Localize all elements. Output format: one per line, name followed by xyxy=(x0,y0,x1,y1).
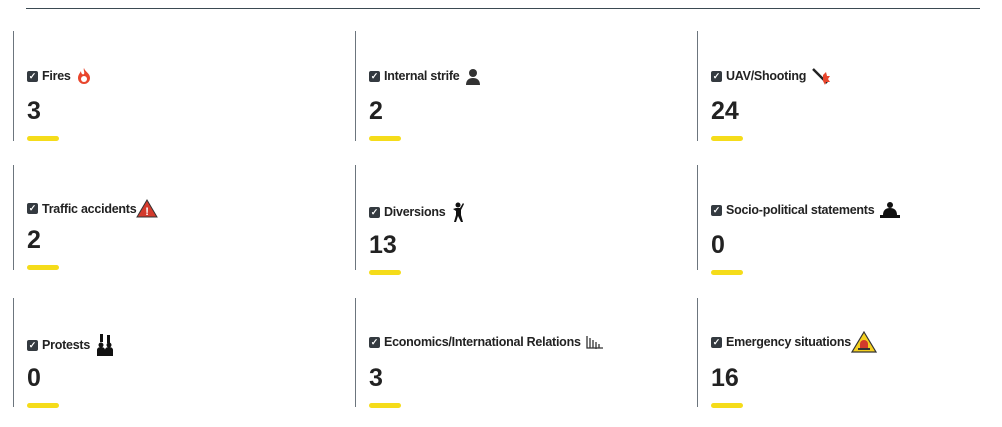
number: 24 xyxy=(711,97,739,125)
bar xyxy=(369,270,401,275)
panel: traffic accidents xyxy=(13,165,344,270)
label: ✓ xyxy=(29,203,36,213)
number: 13 xyxy=(369,231,397,259)
panel: economics xyxy=(355,298,686,407)
label xyxy=(711,68,830,85)
panel: internal strife xyxy=(355,31,686,141)
label: fires: ✓ xyxy=(29,70,36,80)
bar xyxy=(369,403,401,408)
label xyxy=(27,199,158,218)
label: Socio-political statements xyxy=(726,203,874,217)
bar xyxy=(711,270,743,275)
label xyxy=(369,69,480,85)
bar xyxy=(711,403,743,408)
label: Protests xyxy=(42,338,90,352)
label: ! xyxy=(146,206,149,218)
label xyxy=(27,334,113,356)
number: 2 xyxy=(369,97,383,125)
number: 0 xyxy=(27,364,41,392)
panel: diversions xyxy=(355,165,686,270)
number: 16 xyxy=(711,364,739,392)
label: fires xyxy=(27,68,90,84)
number: 2 xyxy=(27,226,41,254)
label xyxy=(711,202,900,218)
label: ✓ xyxy=(713,70,720,80)
panel: uav xyxy=(697,31,1002,141)
number: 3 xyxy=(369,364,383,392)
label: Diversions xyxy=(384,205,445,219)
bar xyxy=(27,403,59,408)
label: fires: Fires xyxy=(42,69,71,83)
label: ✓ xyxy=(713,336,720,346)
panel: socio-political xyxy=(697,165,1002,270)
bar xyxy=(711,136,743,141)
number: 3 xyxy=(27,97,41,125)
label: ✓ xyxy=(29,340,36,350)
label: Emergency situations xyxy=(726,335,851,349)
label: Traffic accidents xyxy=(42,202,136,216)
label: Internal strife xyxy=(384,69,459,83)
bar xyxy=(369,136,401,141)
label: UAV/Shooting xyxy=(726,69,806,83)
panel: emergency xyxy=(697,298,1002,407)
label: ✓ xyxy=(371,206,378,216)
panel: fires xyxy=(13,31,344,141)
number: 0 xyxy=(711,231,725,259)
label: ✓ xyxy=(713,204,720,214)
panel: protests xyxy=(13,298,344,407)
label xyxy=(369,202,464,222)
label xyxy=(711,331,877,353)
label: ✓ xyxy=(371,70,378,80)
label: ✓ xyxy=(371,336,378,346)
label: Economics/International Relations xyxy=(384,335,581,349)
bar xyxy=(27,265,59,270)
bar xyxy=(27,136,59,141)
